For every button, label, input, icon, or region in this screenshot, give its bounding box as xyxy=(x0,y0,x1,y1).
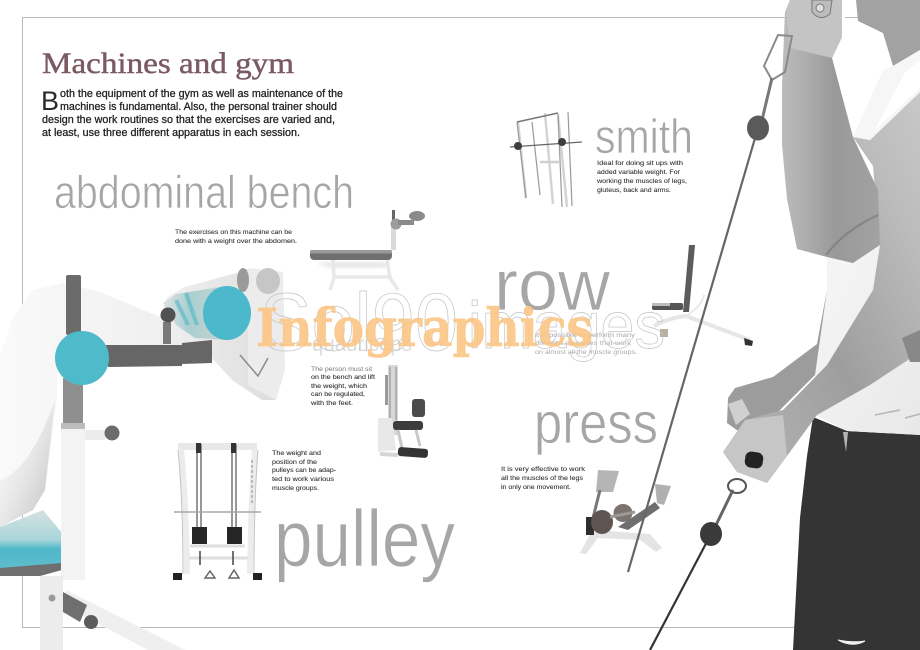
fist xyxy=(786,0,842,58)
smith machine xyxy=(510,112,582,207)
text: smith description: working the muscles of legs, xyxy=(596,178,687,185)
lower rope xyxy=(716,490,733,525)
leg post lower xyxy=(40,576,63,650)
quadriceps machine xyxy=(378,365,428,458)
watermark: outline Sol90images: images xyxy=(468,288,665,362)
text: quadriceps description: with the feet. xyxy=(310,400,353,407)
sleeve xyxy=(853,50,920,140)
large photo: leg on abdominal machine xyxy=(0,268,285,650)
text: press description: all the muscles of the legs xyxy=(501,475,584,482)
intro text block: machines is fundamental. Also, the personal trainer should xyxy=(60,101,337,113)
upper forearm xyxy=(782,0,880,263)
shorts xyxy=(793,417,920,650)
pad roller xyxy=(163,286,227,340)
text: row description: on almost all the muscle groups. xyxy=(535,349,637,356)
text: press description xyxy=(501,466,586,491)
text: pulley description xyxy=(272,450,336,492)
seat cushion xyxy=(0,510,62,570)
sleeve shadow xyxy=(902,330,920,362)
thigh shadow xyxy=(0,400,55,527)
row machine xyxy=(652,245,753,346)
text: quadriceps description: the weight, which xyxy=(311,383,367,390)
upper cable xyxy=(628,128,758,572)
title: Machines and gym xyxy=(42,47,294,80)
press machine xyxy=(580,470,671,554)
text: abdominal bench description: The exercises on this machine can be xyxy=(175,229,292,236)
man with cable xyxy=(628,0,920,650)
small knob xyxy=(163,322,171,344)
intro text block: oth the equipment of the gym as well as maintenance of the xyxy=(60,88,343,100)
upper ball xyxy=(747,116,769,140)
text: quadriceps description: can be regulated, xyxy=(311,391,365,398)
text: pulley description: pulleys can be adap- xyxy=(272,467,336,474)
text: quadriceps description xyxy=(310,366,375,407)
lower hand xyxy=(723,415,787,483)
heading: smith: smith xyxy=(595,111,693,164)
lower cable xyxy=(650,534,711,650)
heading: press: press xyxy=(534,391,658,456)
heading: quadriceps (faint): quadriceps xyxy=(312,333,412,356)
text: press description: in only one movement. xyxy=(501,484,571,491)
carabiner xyxy=(764,35,792,80)
post knob xyxy=(85,430,105,440)
text: smith description: Ideal for doing sit ups with xyxy=(597,160,683,167)
rear forearm xyxy=(727,290,827,436)
leg xyxy=(0,269,285,527)
watermark: Infographics: Infographics xyxy=(256,298,593,359)
text: pulley description: ted to work various xyxy=(272,476,335,483)
text: row description: It is possible to perform many xyxy=(535,332,636,339)
text: pulley description: The weight and xyxy=(272,450,321,457)
ring xyxy=(728,479,746,493)
text: smith description: added variable weight. For xyxy=(597,169,681,176)
handle knob xyxy=(744,451,764,469)
text: quadriceps description: The person must sit xyxy=(311,366,372,373)
upper arm and front forearm xyxy=(723,92,920,483)
diagonal bar xyxy=(64,590,185,650)
heading: abdominal bench: abdominal bench xyxy=(54,166,354,218)
watermark: outline Sol90images xyxy=(260,277,665,368)
text: row description: different exercises that work xyxy=(535,340,632,347)
upper rope xyxy=(762,78,772,120)
blue knee pad xyxy=(55,331,109,385)
lever arm xyxy=(105,340,212,367)
text: abdominal bench description xyxy=(175,229,297,245)
text: pulley description: muscle groups. xyxy=(272,485,319,492)
intro text block: at least, use three different apparatus in each session. xyxy=(42,127,300,139)
foot shading xyxy=(238,268,285,400)
lower post xyxy=(63,378,83,423)
intro text block: B xyxy=(41,86,59,116)
abdominal bench machine xyxy=(310,210,425,290)
watermark: outline Sol90images: Sol90 xyxy=(260,277,458,368)
text: smith description: gluteus, back and arms. xyxy=(597,187,671,194)
intro text block xyxy=(41,86,343,139)
intro text block: design the work routines so that the exercises are varied and, xyxy=(42,114,335,126)
blue roller end xyxy=(203,286,251,340)
seat base strip xyxy=(0,563,62,576)
neck xyxy=(856,0,920,66)
text: quadriceps description: on the bench and lift xyxy=(311,374,375,381)
white post xyxy=(61,423,85,580)
heading: pulley: pulley xyxy=(274,494,455,583)
heading: row: row xyxy=(494,246,611,326)
text: smith description xyxy=(596,160,687,194)
shirt body xyxy=(815,240,920,435)
upright dark post xyxy=(66,275,81,335)
text: press description: It is very effective to work xyxy=(501,466,586,473)
text: row description xyxy=(535,332,637,356)
pulley machine xyxy=(173,443,262,580)
text: pulley description: position of the xyxy=(272,459,317,466)
lower ball xyxy=(700,522,722,546)
text: abdominal bench description: done with a weight over the abdomen. xyxy=(175,238,297,245)
